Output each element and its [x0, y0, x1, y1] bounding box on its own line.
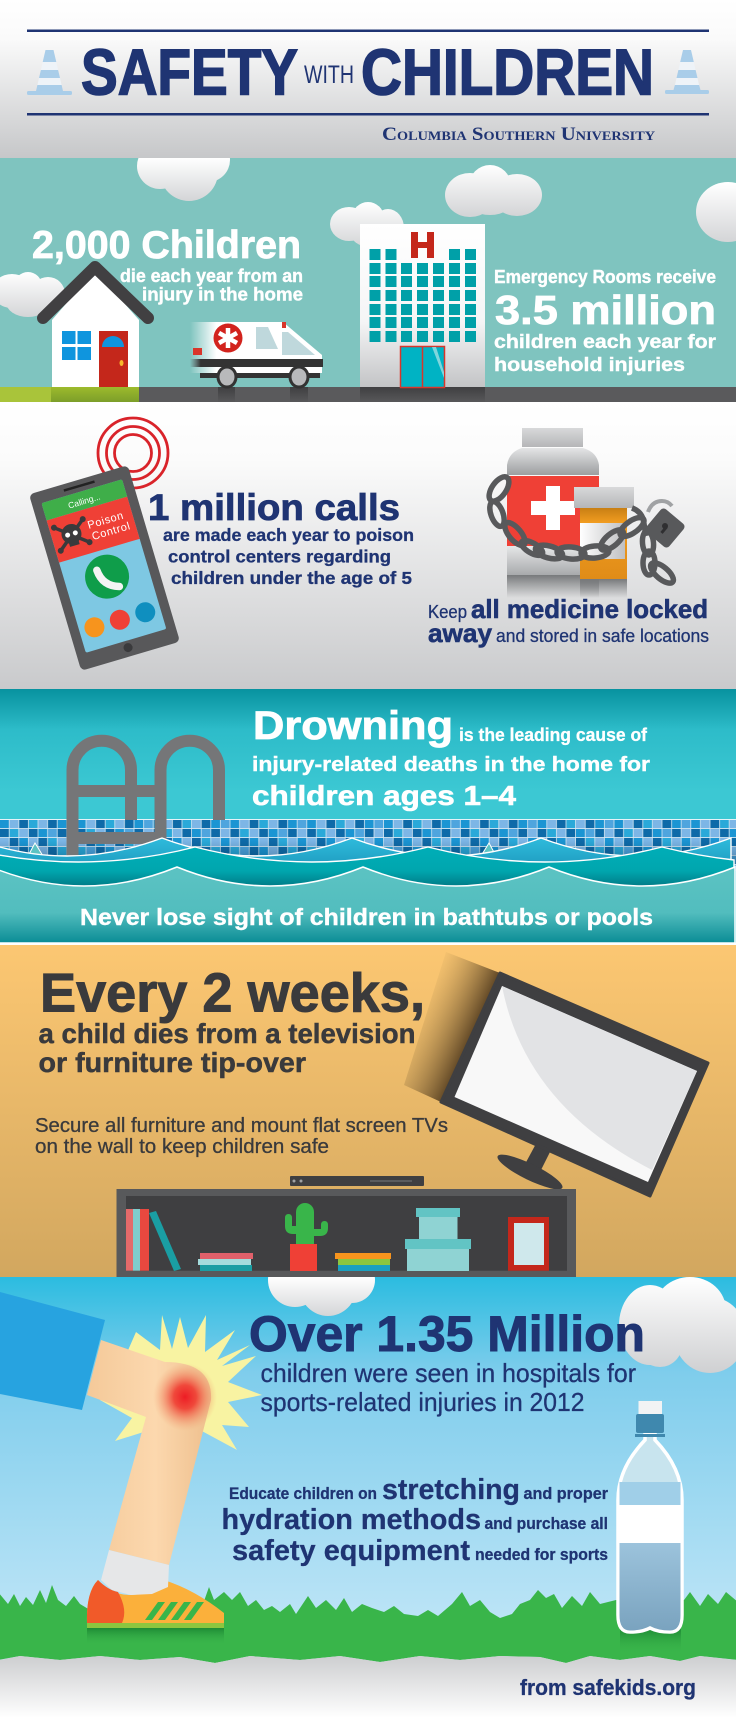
icon: phone: Control [91, 520, 132, 543]
icon: sneaker [87, 1580, 224, 1645]
icon: water bottle [618, 1401, 682, 1654]
text: educate children: safety equipment [232, 1535, 470, 1567]
stat: 3.5 million: children each year for [494, 331, 716, 353]
title [81, 36, 654, 108]
text: secure furniture: Secure all furniture and mount flat screen TVs [35, 1114, 448, 1137]
title: CHILDREN [361, 36, 654, 108]
text: drowning stat: injury-related deaths in the home for [252, 753, 650, 776]
icon: signal rings [98, 418, 168, 488]
text: educate children: needed for sports [475, 1545, 608, 1564]
icon: phone: Poison [86, 510, 125, 532]
panel: drowning [0, 689, 736, 945]
text: keep medicine locked: away [428, 618, 493, 648]
text: educate children: stretching [382, 1474, 520, 1506]
stat: 1.35 million: Over 1.35 Million [249, 1306, 645, 1362]
icon: phone [29, 465, 180, 671]
road [0, 387, 736, 402]
text: drowning stat: children ages 1–4 [252, 780, 516, 811]
icon: skull and crossbones [50, 515, 93, 554]
text: every 2 weeks: a child dies from a television [38, 1018, 416, 1049]
icon: phone: Calling... [67, 492, 101, 511]
text: educate children: and purchase all [484, 1514, 608, 1533]
icon: medicine bottles and chain [485, 428, 686, 598]
text: every 2 weeks: or furniture tip-over [38, 1047, 306, 1078]
university name: Columbia Southern University [382, 124, 656, 145]
text: educate children: Educate children on [229, 1484, 377, 1503]
panel: header [0, 0, 736, 158]
clouds [268, 1277, 736, 1373]
stat: 3.5 million: Emergency Rooms receive [494, 267, 716, 287]
icon: left traffic cone [27, 50, 72, 95]
stat: 3.5 million: household injuries [494, 354, 685, 376]
text: keep medicine locked: Keep [428, 602, 467, 622]
stat: 1 million calls: 1 million calls [148, 487, 400, 528]
text: educate children: hydration methods [222, 1504, 481, 1536]
text: drowning stat: Drowning [253, 704, 453, 748]
panel: poison and medicine [0, 402, 736, 689]
stat: 1.35 million: children were seen in hospitals for [260, 1358, 636, 1388]
stat: 2,000 children [32, 224, 303, 304]
source credit: from safekids.org [520, 1675, 696, 1700]
stat: 1 million calls: control centers regarding [168, 546, 391, 566]
stat: 2,000 children: injury in the home [142, 284, 303, 304]
text: every 2 weeks: Every 2 weeks, [40, 962, 425, 1024]
text: educate children [222, 1474, 608, 1567]
clouds [0, 158, 736, 317]
stat: 2,000 children: 2,000 Children [32, 224, 301, 267]
stat: 3.5 million: 3.5 million [495, 287, 716, 333]
icon: right traffic cone [665, 50, 709, 94]
text: keep medicine locked [428, 594, 709, 648]
icon: sound bar [290, 1176, 424, 1186]
stat: 2,000 children: die each year from an [120, 266, 303, 286]
pool tiles [0, 819, 736, 871]
text: drowning stat [252, 704, 650, 811]
panel: tip-overs [0, 945, 736, 1277]
icon: injured leg [0, 1292, 262, 1645]
title: SAFETY [81, 36, 298, 108]
water waves [0, 838, 735, 943]
stat: 1 million calls [148, 487, 414, 588]
icon: house [43, 267, 148, 387]
text: every 2 weeks [38, 962, 425, 1078]
text: keep medicine locked: all medicine locked [471, 594, 708, 624]
icon: tipping television [404, 952, 708, 1196]
icon: ambulance [190, 322, 323, 387]
stat: 1 million calls: are made each year to poison [163, 525, 414, 545]
text: secure furniture [35, 1114, 448, 1158]
panel: home injuries [0, 138, 736, 402]
text: keep medicine locked: and stored in safe locations [496, 626, 709, 646]
icon: hospital [360, 224, 485, 388]
text: drowning stat: is the leading cause of [459, 725, 648, 745]
grass [0, 1585, 736, 1663]
stat: 1 million calls: children under the age of 5 [171, 568, 412, 588]
icon: shelf with objects [116, 1189, 576, 1277]
panel: sports injuries [0, 1253, 736, 1663]
title: WITH [304, 61, 354, 89]
icon: pool ladder [72, 741, 219, 856]
stat: 1.35 million: sports-related injuries in 2012 [260, 1387, 584, 1417]
stat: 1.35 million [249, 1306, 645, 1417]
text: educate children: and proper [524, 1484, 608, 1503]
text: secure furniture: on the wall to keep children safe [35, 1135, 329, 1158]
stat: 3.5 million [494, 267, 716, 376]
text: never lose sight: Never lose sight of children in bathtubs or pools [80, 904, 653, 930]
panel: footer [0, 1656, 736, 1718]
